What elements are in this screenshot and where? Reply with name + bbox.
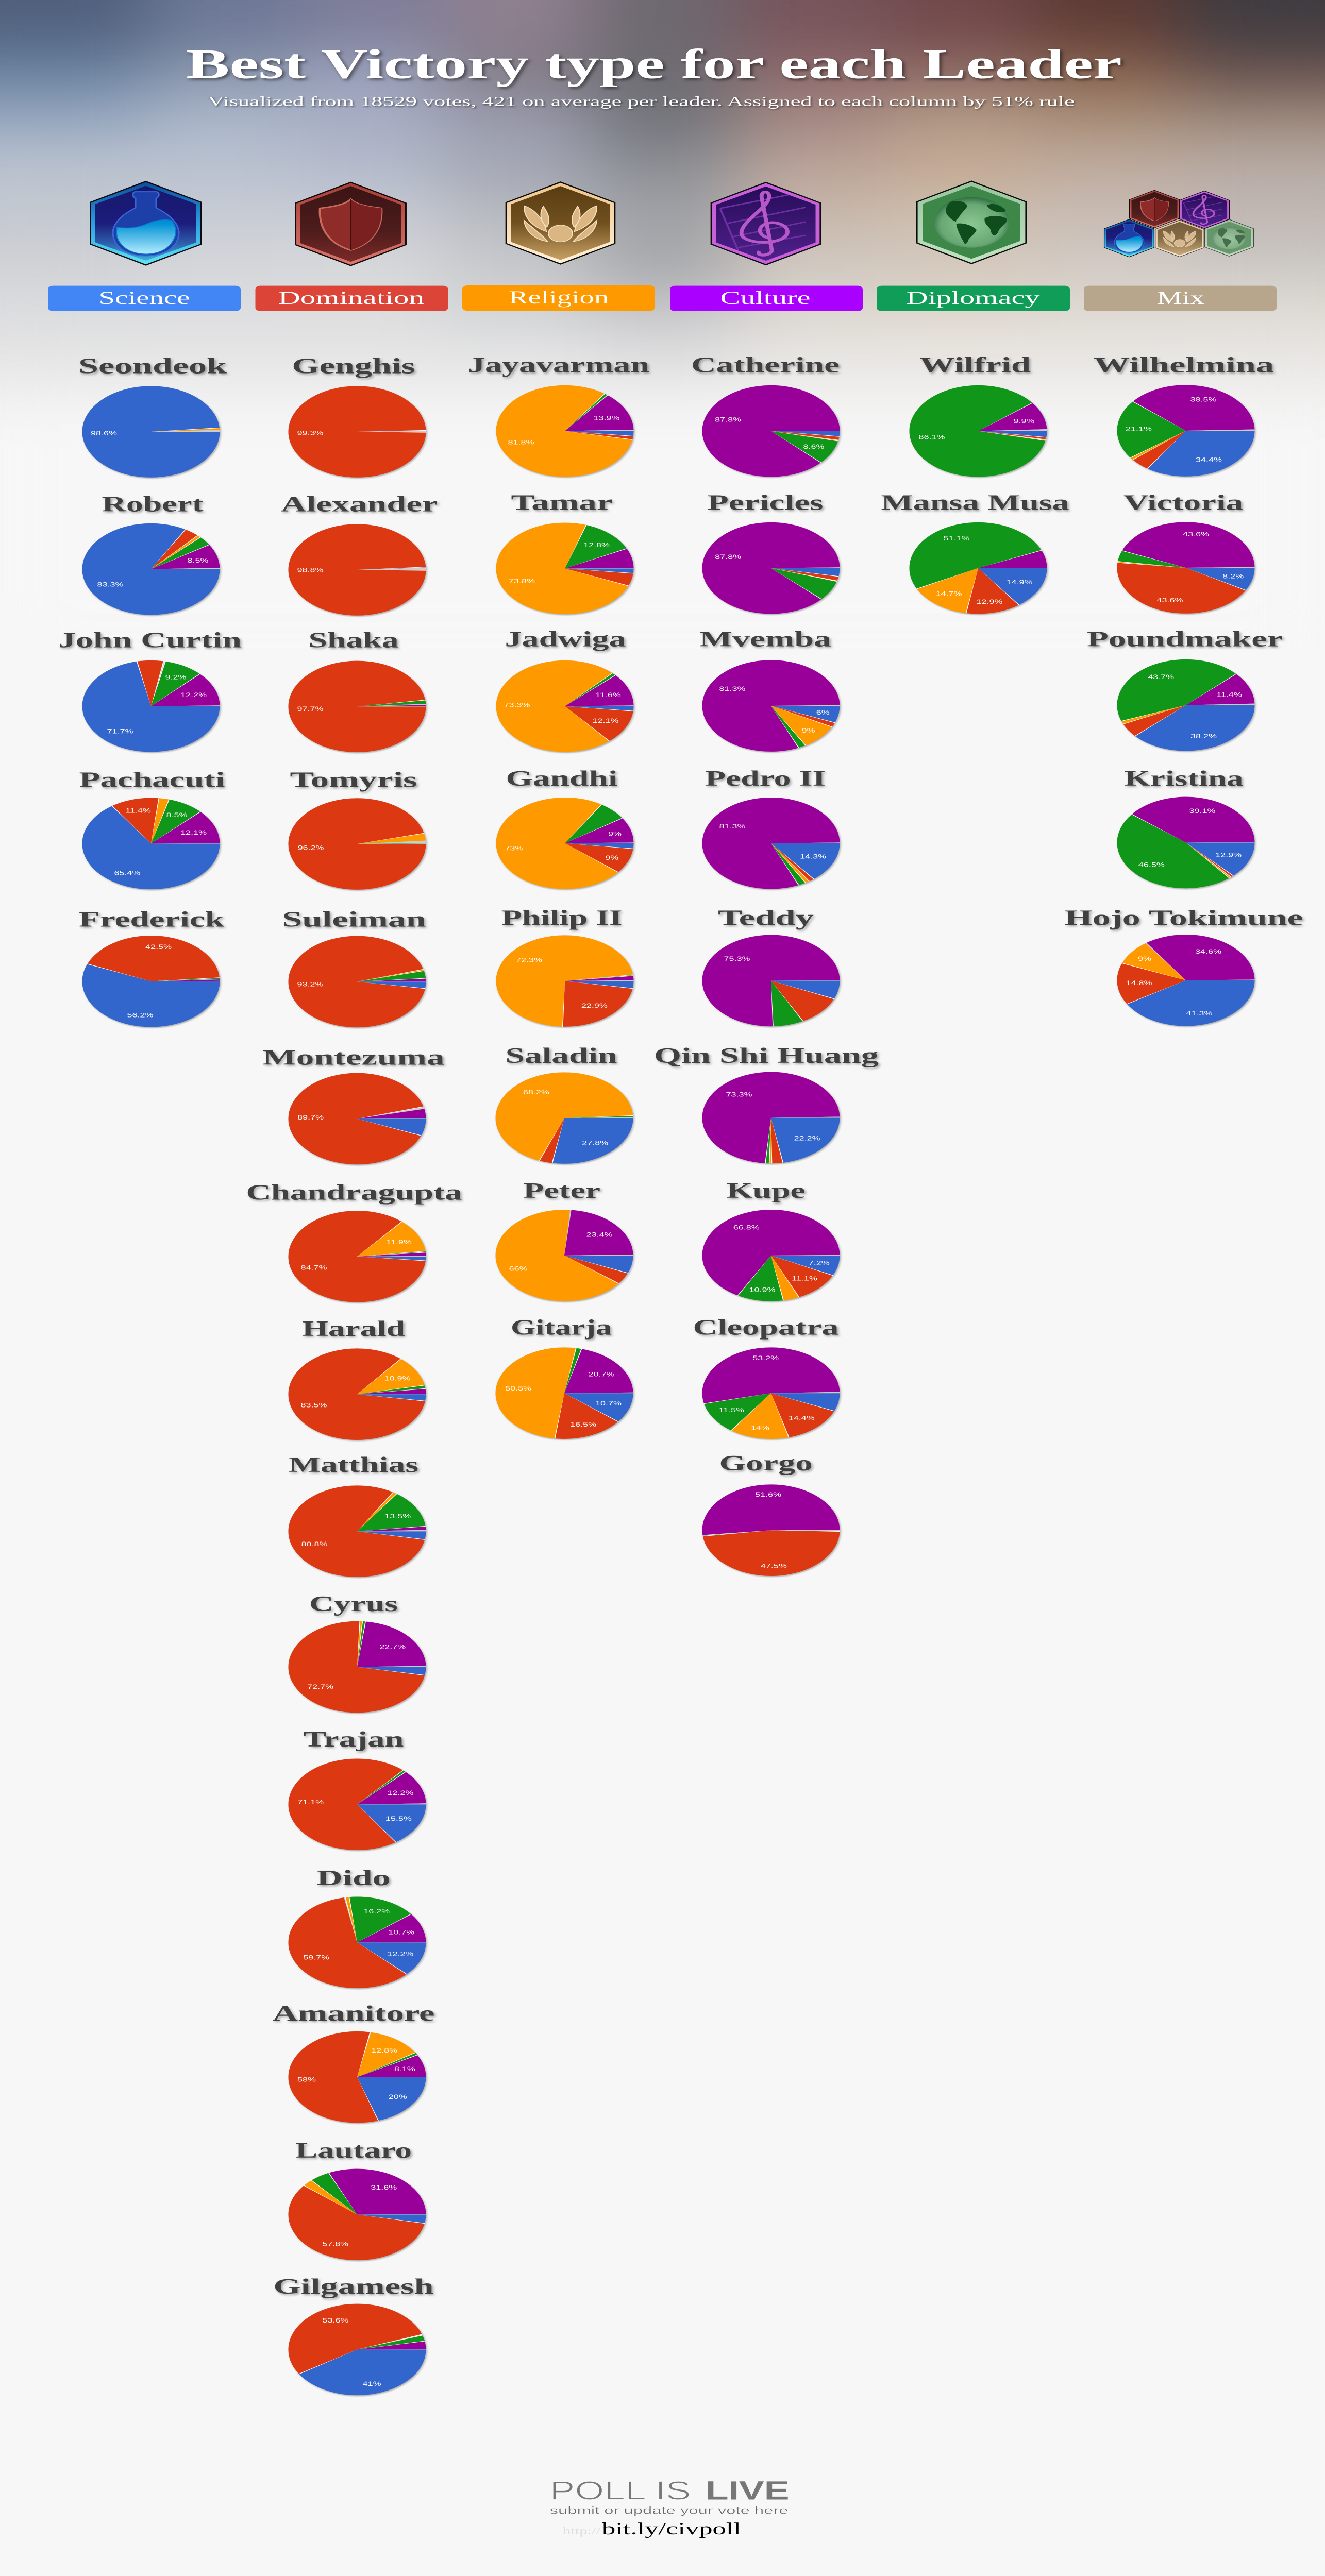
name: Frederick [79, 907, 225, 931]
value labels: 65.4% [114, 870, 141, 876]
leader: Catherine [691, 353, 840, 477]
value labels: 72.7% [307, 1684, 334, 1690]
name: Genghis [292, 354, 415, 378]
pie chart [909, 522, 1047, 614]
value labels: 14.7% [936, 590, 962, 598]
legend pill: diplomacy: Diplomacy [906, 287, 1040, 308]
value labels: 16.2% [363, 1908, 390, 1915]
subtitle: Visualized from 18529 votes, 421 on average per leader. Assigned to each column by 51% rule [208, 94, 1075, 109]
pie chart [289, 1896, 426, 1988]
value labels: 22.2% [794, 1135, 820, 1142]
pie chart [1117, 797, 1254, 888]
leader: Chandragupta [246, 1180, 462, 1302]
value labels: 99.3% [297, 430, 324, 436]
legend pill: culture [670, 286, 863, 311]
value labels [718, 1355, 815, 1432]
value labels: 43.6% [1183, 531, 1210, 538]
leader: Pachacuti [79, 768, 225, 889]
value labels: 98.6% [91, 430, 117, 437]
name: Victoria [1123, 490, 1243, 515]
legend pill: mix [1084, 286, 1277, 311]
leader: Montezuma [263, 1045, 444, 1164]
value labels: 11.1% [792, 1275, 817, 1282]
value labels: 23.4% [586, 1231, 613, 1239]
pie chart [496, 1347, 633, 1439]
value labels: 87.8% [715, 554, 742, 561]
value labels: 53.2% [752, 1355, 779, 1362]
name: Alexander [281, 492, 438, 516]
leader: Wilfrid [909, 353, 1047, 477]
value labels: 12.8% [583, 542, 610, 549]
value labels: 51.1% [944, 535, 970, 542]
name: Lautaro [295, 2138, 412, 2162]
pie chart [289, 386, 426, 478]
pie chart [702, 935, 840, 1026]
value labels: 81.3% [719, 823, 746, 830]
pie chart [289, 2031, 426, 2123]
footer heading [550, 2476, 789, 2505]
value labels: 56.2% [127, 1012, 154, 1019]
footer heading: POLL IS [550, 2476, 691, 2505]
name: Kupe [726, 1178, 805, 1202]
value labels [323, 2317, 381, 2387]
pie chart [289, 1073, 426, 1164]
name: Hojo Tokimune [1065, 906, 1303, 930]
value labels: 11.6% [595, 692, 621, 699]
pie chart [496, 660, 634, 752]
value labels [509, 542, 610, 585]
value labels [127, 944, 172, 1019]
value labels: 12.1% [180, 829, 207, 836]
leader: Teddy [702, 906, 840, 1026]
pie chart [82, 386, 220, 478]
value labels [1157, 531, 1244, 604]
value labels: 14.4% [789, 1415, 815, 1422]
footer heading: LIVE [706, 2476, 789, 2505]
value labels: 66.8% [733, 1224, 760, 1231]
footer: poll call to action [550, 2476, 789, 2538]
name: Gandhi [506, 766, 617, 790]
pie chart [702, 522, 840, 614]
name: Dido [316, 1866, 391, 1890]
pie chart [289, 798, 426, 890]
legend pill: religion: Religion [509, 287, 609, 308]
leader: Tomyris [289, 768, 426, 890]
value labels: 9% [1138, 956, 1151, 962]
value labels: 14.9% [1007, 579, 1033, 586]
leader: Frederick [79, 907, 225, 1027]
value labels [726, 1091, 820, 1142]
leader: Wilhelmina [1094, 353, 1274, 477]
value labels: 9.2% [165, 674, 187, 681]
leader: Cyrus [289, 1592, 426, 1713]
value labels: 12.8% [371, 2047, 398, 2054]
name: Tomyris [290, 768, 417, 792]
value labels: 51.6% [755, 1492, 782, 1498]
name: John Curtin [58, 628, 242, 652]
name: Poundmaker [1087, 627, 1283, 651]
name: Robert [102, 492, 203, 516]
value labels: 72.3% [516, 957, 542, 964]
value labels [297, 1790, 414, 1822]
value labels [1148, 674, 1242, 740]
value labels: 12.9% [1215, 852, 1242, 858]
name: Matthias [289, 1453, 418, 1477]
leader: Matthias [289, 1453, 426, 1577]
leader: Poundmaker [1087, 627, 1283, 751]
leader: Alexander [281, 492, 438, 616]
name: Pericles [707, 490, 823, 515]
name: Peter [523, 1178, 600, 1202]
value labels: 96.2% [298, 845, 324, 852]
value labels: 16.5% [570, 1421, 597, 1428]
value labels [936, 535, 1033, 605]
value labels: 21.1% [1126, 426, 1152, 433]
legend pill: religion [462, 285, 655, 311]
value labels: 11.5% [718, 1407, 745, 1414]
value labels [1126, 948, 1222, 1017]
pie chart [496, 798, 634, 889]
value labels [322, 2184, 397, 2248]
value labels: 10.9% [384, 1375, 411, 1382]
value labels: 97.7% [297, 706, 324, 713]
leader: Shaka [289, 628, 426, 752]
value labels: 38.2% [1190, 733, 1217, 740]
value labels: 47.5% [761, 1563, 787, 1570]
leader: Genghis [289, 354, 426, 478]
name: Jayavarman [468, 353, 649, 377]
leader: Jayavarman [468, 353, 649, 477]
leader: Jadwiga [496, 627, 634, 752]
value labels [114, 807, 207, 876]
value labels: 6% [816, 709, 830, 716]
name: Pachacuti [79, 768, 225, 792]
value labels: 11.9% [386, 1239, 412, 1246]
value labels: 81.3% [719, 686, 746, 692]
pie chart [289, 1485, 426, 1577]
leader: Dido [289, 1866, 426, 1988]
value labels [919, 418, 1035, 440]
leader: Saladin [496, 1043, 633, 1164]
value labels: 14% [751, 1425, 769, 1432]
leader: John Curtin [58, 628, 242, 752]
pie chart [1117, 659, 1254, 751]
value labels: 93.2% [297, 981, 324, 988]
legend pill: science [48, 286, 241, 311]
icon: science flask badge [90, 181, 202, 266]
leader: Gitarja [496, 1315, 633, 1439]
pie chart [496, 523, 634, 614]
leader: Kupe [702, 1178, 840, 1301]
pie chart [702, 1210, 840, 1301]
pie chart [82, 936, 220, 1027]
name: Cleopatra [693, 1315, 838, 1340]
name: Harald [302, 1317, 405, 1341]
name: Gilgamesh [273, 2274, 433, 2298]
value labels [1138, 808, 1242, 869]
pie chart [289, 1348, 426, 1440]
value labels: 50.5% [505, 1385, 532, 1392]
value labels [301, 1375, 411, 1409]
pie chart [289, 661, 426, 752]
pie chart [82, 798, 220, 889]
value labels [303, 1908, 415, 1961]
value labels: 66% [509, 1265, 528, 1272]
pie chart [289, 936, 426, 1027]
value labels: 34.4% [1196, 456, 1222, 464]
value labels [505, 831, 622, 861]
leader: Robert [82, 492, 220, 615]
value labels: 14.3% [800, 853, 827, 860]
leader: Gorgo [702, 1451, 840, 1576]
value labels [509, 1231, 613, 1272]
name: Teddy [718, 906, 814, 930]
value labels [297, 2047, 415, 2100]
footer link: http:// [563, 2525, 601, 2537]
name: Wilhelmina [1094, 353, 1274, 377]
name: Wilfrid [919, 353, 1031, 377]
value labels: 9% [802, 727, 815, 734]
value labels: 59.7% [303, 1954, 330, 1961]
legend pill: domination [256, 286, 448, 311]
pie chart [496, 935, 634, 1027]
value labels: 80.8% [301, 1541, 328, 1548]
pie chart [702, 1347, 840, 1439]
value labels: 12.2% [180, 692, 207, 699]
value labels: 11.4% [125, 807, 151, 815]
leader: Pedro II [702, 766, 840, 889]
pie chart [289, 2169, 426, 2260]
value labels: 57.8% [322, 2241, 349, 2248]
value labels: 39.1% [1189, 808, 1216, 815]
name: Catherine [691, 353, 840, 377]
value labels: 15.5% [385, 1816, 412, 1822]
name: Gitarja [511, 1315, 612, 1340]
leader: Harald [289, 1317, 426, 1440]
leader: Kristina [1117, 766, 1254, 888]
value labels [301, 1513, 411, 1548]
value labels: 83.3% [97, 581, 124, 588]
pie chart [909, 385, 1047, 477]
value labels: 10.9% [749, 1286, 776, 1294]
legend pill: domination: Domination [278, 287, 424, 308]
value labels: 8.1% [394, 2066, 415, 2073]
value labels: 81.8% [508, 439, 534, 446]
value labels: 71.7% [107, 728, 133, 735]
value labels [1126, 396, 1222, 464]
value labels: 86.1% [919, 434, 945, 440]
icon: culture treble clef badge [711, 182, 821, 265]
value labels: 43.6% [1157, 597, 1183, 604]
footer subtext: submit or update your vote here [550, 2505, 789, 2516]
leader: Cleopatra [693, 1315, 840, 1439]
value labels: 73.8% [509, 578, 535, 585]
leader: Tamar [496, 490, 634, 614]
value labels [733, 1224, 830, 1294]
legend pill: mix: Mix [1157, 287, 1204, 308]
leader: Lautaro [289, 2138, 426, 2260]
value labels: 10.7% [595, 1400, 622, 1407]
pie chart [82, 660, 220, 752]
value labels: 38.5% [1190, 396, 1217, 403]
name: Saladin [506, 1043, 617, 1067]
pie chart [702, 1484, 840, 1576]
pie chart [702, 385, 840, 477]
value labels: 8.5% [166, 812, 188, 819]
name: Montezuma [263, 1045, 444, 1070]
value labels [307, 1643, 406, 1690]
value labels: 41% [363, 2381, 381, 2387]
leader: Philip II [496, 906, 634, 1027]
value labels [715, 417, 825, 450]
value labels: 31.6% [371, 2184, 397, 2191]
pie chart [702, 1072, 840, 1163]
name: Mvemba [699, 627, 831, 651]
name: Amanitore [272, 2001, 434, 2025]
value labels: 89.7% [297, 1114, 324, 1121]
value labels: 12.2% [388, 1951, 414, 1958]
name: Cyrus [309, 1592, 398, 1616]
value labels: 22.9% [581, 1003, 608, 1009]
value labels [508, 415, 620, 446]
icon: mix of five badges [1104, 190, 1254, 257]
value labels [97, 557, 209, 588]
value labels: 10.7% [388, 1929, 415, 1936]
leader: Gilgamesh [273, 2274, 434, 2395]
pie chart [289, 524, 426, 616]
pie chart [496, 385, 634, 477]
value labels: 41.3% [1186, 1010, 1213, 1017]
value labels: 20.7% [589, 1371, 615, 1378]
leader: Gandhi [496, 766, 634, 889]
value labels: 14.8% [1126, 980, 1152, 987]
value labels: 9% [605, 855, 619, 861]
value labels: 46.5% [1138, 861, 1165, 869]
leader: Suleiman [282, 907, 426, 1027]
name: Suleiman [282, 907, 426, 931]
value labels: 83.5% [301, 1402, 327, 1409]
value labels: 20% [389, 2094, 407, 2100]
value labels: 8.5% [188, 557, 209, 564]
value labels: 13.5% [384, 1513, 411, 1520]
value labels [523, 1089, 609, 1147]
pie chart [289, 1621, 426, 1713]
value labels: 7.2% [809, 1260, 830, 1267]
pie chart [1117, 385, 1254, 477]
value labels: 12.9% [977, 599, 1003, 605]
value labels: 9% [608, 831, 622, 838]
leader: Mvemba [699, 627, 840, 752]
value labels: 13.9% [594, 415, 620, 422]
value labels: 8.6% [803, 444, 825, 450]
name: Mansa Musa [881, 490, 1069, 515]
title: Best Victory type for each Leader [186, 41, 1122, 88]
leader: Hojo Tokimune [1065, 906, 1303, 1026]
value labels: 42.5% [145, 944, 172, 951]
name: Seondeok [78, 354, 227, 378]
name: Tamar [511, 490, 612, 515]
name: Shaka [308, 628, 399, 652]
icon: diplomacy globe badge [916, 180, 1027, 264]
pie chart [289, 1758, 426, 1850]
name: Philip II [501, 906, 622, 930]
pie chart [702, 798, 840, 889]
value labels [755, 1492, 787, 1570]
leader: Pericles [702, 490, 840, 614]
pie chart [1117, 522, 1254, 614]
leader: Amanitore [272, 2001, 435, 2123]
footer link: bit.ly/civpoll [602, 2519, 741, 2538]
name: Pedro II [705, 766, 826, 790]
legend pill: science: Science [98, 287, 190, 308]
leader: Mansa Musa [881, 490, 1069, 614]
value labels: 27.8% [582, 1140, 609, 1147]
pie chart [496, 1072, 633, 1164]
leader: Peter [496, 1178, 633, 1301]
value labels: 58% [297, 2076, 316, 2083]
value labels: 43.7% [1148, 674, 1175, 681]
pie chart [1117, 935, 1254, 1026]
value labels: 73.3% [504, 702, 530, 709]
value labels [516, 957, 608, 1009]
value labels: 98.8% [297, 567, 324, 573]
value labels: 84.7% [301, 1265, 327, 1272]
leader: Qin Shi Huang [654, 1043, 879, 1163]
pie chart [496, 1210, 633, 1301]
value labels [301, 1239, 412, 1272]
value labels [719, 686, 830, 734]
value labels: 12.2% [388, 1790, 414, 1797]
value labels: 12.1% [593, 718, 619, 724]
value labels: 9.9% [1014, 418, 1035, 425]
value labels: 71.1% [297, 1799, 324, 1806]
leader: Victoria [1117, 490, 1254, 614]
value labels: 11.4% [1216, 691, 1242, 699]
pie chart [82, 523, 220, 615]
value labels: 87.8% [715, 417, 742, 423]
value labels [505, 1371, 622, 1428]
value labels: 34.6% [1195, 948, 1222, 955]
value labels: 73.3% [726, 1091, 752, 1098]
value labels [504, 692, 621, 724]
name: Gorgo [719, 1451, 812, 1475]
leader: Trajan [289, 1727, 426, 1850]
pie chart [702, 660, 840, 752]
name: Chandragupta [246, 1180, 462, 1205]
value labels: 75.3% [724, 956, 750, 962]
name: Jadwiga [505, 627, 626, 651]
value labels: 22.7% [379, 1643, 406, 1651]
name: Qin Shi Huang [654, 1043, 879, 1067]
pie chart [289, 2304, 426, 2395]
icon: religion wings badge [506, 181, 615, 265]
value labels: 68.2% [523, 1089, 549, 1096]
name: Kristina [1124, 766, 1243, 790]
icon: domination shield badge [295, 182, 407, 266]
pie chart [289, 1211, 426, 1302]
legend pill: diplomacy [877, 286, 1070, 311]
value labels [719, 823, 827, 860]
value labels: 8.2% [1222, 573, 1244, 580]
legend pill: culture: Culture [720, 287, 810, 308]
value labels [107, 674, 207, 735]
leader: Seondeok [78, 354, 227, 478]
name: Trajan [304, 1727, 404, 1751]
value labels: 73% [505, 845, 524, 852]
value labels: 53.6% [323, 2317, 349, 2324]
